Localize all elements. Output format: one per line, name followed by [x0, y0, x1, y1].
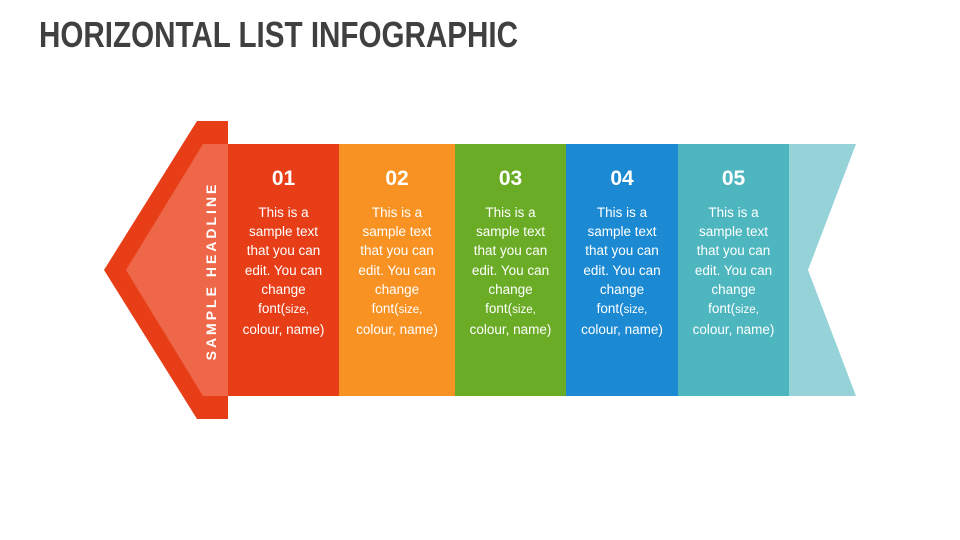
text 05 — [693, 205, 774, 337]
text 05: edit. You can — [695, 263, 772, 278]
text 01 — [243, 205, 324, 337]
text 03: edit. You can — [472, 263, 549, 278]
text 05: This is a — [708, 205, 759, 220]
text 04: that you can — [585, 243, 659, 258]
text 05: colour, name) — [693, 322, 774, 337]
number 03: 03 — [499, 167, 522, 190]
text 03: font(size, — [485, 301, 536, 316]
text 03: change — [488, 282, 533, 297]
text 04: sample text — [587, 224, 657, 239]
text 05: font(size, — [708, 301, 759, 316]
text 03: colour, name) — [470, 322, 551, 337]
text 01: change — [261, 282, 306, 297]
number 01: 01 — [272, 167, 295, 190]
number 04: 04 — [610, 167, 634, 190]
tail — [789, 144, 856, 396]
text 04: font(size, — [597, 301, 647, 316]
panel 02 — [339, 144, 455, 396]
text 04 — [581, 205, 663, 337]
text 02 — [356, 205, 438, 337]
text 03: that you can — [474, 243, 547, 258]
title: HORIZONTAL LIST INFOGRAPHIC — [39, 14, 518, 55]
text 01: that you can — [247, 243, 320, 258]
text 04: This is a — [597, 205, 647, 220]
headline vertical: SAMPLE HEADLINE — [203, 182, 219, 360]
text 01: colour, name) — [243, 322, 324, 337]
text 01: sample text — [249, 224, 318, 239]
text 02: font(size, — [372, 301, 422, 316]
text 01: This is a — [258, 205, 309, 220]
text 02: edit. You can — [358, 263, 436, 278]
number 05: 05 — [722, 167, 745, 190]
panel 04 — [566, 144, 678, 396]
panel 03 — [455, 144, 566, 396]
text 04: colour, name) — [581, 322, 663, 337]
text 01: font(size, — [258, 301, 309, 316]
text 02: that you can — [360, 243, 434, 258]
arrow head outer — [104, 121, 228, 419]
text 03 — [470, 205, 551, 337]
text 05: change — [711, 282, 756, 297]
text 02: colour, name) — [356, 322, 438, 337]
text 05: that you can — [697, 243, 770, 258]
text 05: sample text — [699, 224, 768, 239]
arrow head inner — [126, 144, 228, 396]
panel 01 — [228, 144, 339, 396]
text 03: This is a — [485, 205, 536, 220]
text 02: This is a — [372, 205, 422, 220]
text 02: change — [375, 282, 419, 297]
text 02: sample text — [362, 224, 432, 239]
text 04: change — [600, 282, 644, 297]
text 04: edit. You can — [583, 263, 661, 278]
panel 05 — [678, 144, 789, 396]
number 02: 02 — [385, 167, 409, 190]
text 01: edit. You can — [245, 263, 322, 278]
text 03: sample text — [476, 224, 545, 239]
